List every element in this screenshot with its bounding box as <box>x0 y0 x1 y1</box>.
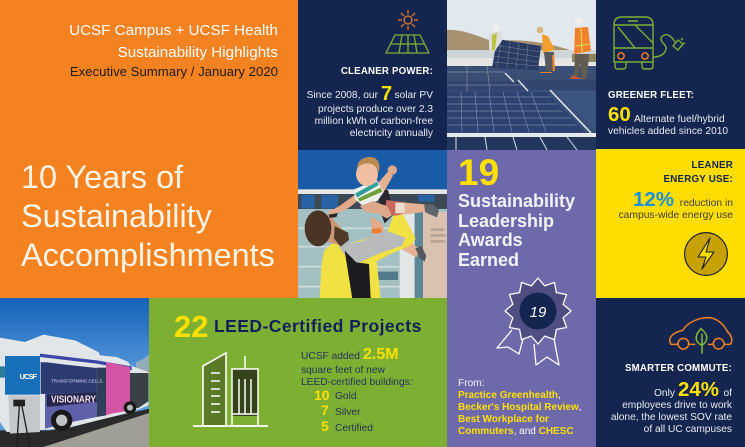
list: certification counts: Silver <box>335 406 360 418</box>
panel: leaner energy use <box>596 149 745 298</box>
panel: orange title <box>0 0 298 298</box>
photo: UCSF electric bus: TRANSFORMING CELLS <box>51 378 103 383</box>
icon: lightning bolt <box>684 232 728 276</box>
icon: award ribbon: 19 <box>530 304 547 321</box>
list: certification counts: Certified <box>335 422 373 434</box>
text: fleet description: Alternate fuel/hybrid <box>634 114 725 125</box>
number: 7 solar projects: 7 <box>381 83 392 105</box>
title: 10 Years of <box>21 159 183 195</box>
photo: UCSF electric bus: VISIONARY <box>51 394 96 405</box>
number: 12 percent: 12% <box>633 188 674 211</box>
text: solar description lines: million kWh of carbon-free <box>315 116 433 126</box>
number: 24 percent: 24% <box>678 378 719 401</box>
list: certification counts: 5 <box>321 418 329 434</box>
text: commute lines: of all UC campuses <box>644 424 732 435</box>
title: Sustainability <box>21 198 212 234</box>
number: 19 awards: 19 <box>458 152 499 193</box>
number: 22 projects: 22 <box>174 309 208 344</box>
icon: award ribbon <box>496 277 572 366</box>
text: LEED buildings line <box>301 364 413 388</box>
text: commute first word: Only <box>654 388 675 399</box>
heading: awards earned <box>458 191 575 270</box>
text: solar description lines <box>315 104 433 138</box>
icon: sun and solar panel <box>385 10 430 54</box>
text: solar description lines: projects produce over 2.3 <box>318 104 433 114</box>
panel: leadership awards: Commuters, and CHESC <box>458 426 574 437</box>
text: LEED buildings line: LEED-certified buildings: <box>301 377 413 388</box>
title <box>21 159 275 273</box>
photo: UCSF electric bus: UCSF <box>20 372 38 381</box>
panel: LEED projects <box>149 298 447 447</box>
text: solar description: Since 2008, our <box>307 90 378 101</box>
text: commute lines: alone, the lowest SOV rate <box>611 412 732 423</box>
photo: UCSF electric bus <box>0 298 149 447</box>
panel: greener fleet <box>596 0 745 149</box>
icon: electric bus <box>613 16 686 70</box>
panel: leadership awards: Best Workplace for <box>458 414 549 425</box>
panel: greener fleet: vehicles added since 2010 <box>608 126 728 137</box>
heading: report title <box>69 22 278 61</box>
heading: cleaner power: CLEANER POWER: <box>341 66 433 77</box>
heading: report title: Sustainability Highlights <box>118 44 278 61</box>
text: solar description continued: solar PV <box>394 90 433 101</box>
heading: awards earned: Awards <box>458 230 523 250</box>
icon: car with leaf <box>669 316 732 354</box>
list: certification counts: 10 <box>314 387 330 403</box>
heading: leaner energy use <box>663 160 733 184</box>
text: energy description: reduction in <box>680 198 733 209</box>
text: LEED description: UCSF added <box>301 351 360 362</box>
number: 2.5M square feet: 2.5M <box>363 346 399 363</box>
text: commute of: of <box>724 388 732 399</box>
heading: leaner energy use: LEANER <box>692 160 733 171</box>
title: Accomplishments <box>21 237 275 273</box>
text: report date: Executive Summary / January 2020 <box>70 64 278 79</box>
panel: cleaner power <box>298 0 447 150</box>
panel: leaner energy use: campus-wide energy use <box>619 210 733 221</box>
photo: workers installing solar panels <box>447 0 596 150</box>
list: certification counts: Gold <box>335 391 357 402</box>
heading: report title: UCSF Campus + UCSF Health <box>69 22 278 39</box>
heading: greener fleet: GREENER FLEET: <box>608 90 694 101</box>
heading: leaner energy use: ENERGY USE: <box>663 174 733 184</box>
text: LEED buildings line: square feet of new <box>301 364 385 376</box>
heading: awards earned: Leadership <box>458 210 554 230</box>
panel: smarter commute <box>596 298 745 447</box>
panel: leadership awards <box>447 150 596 447</box>
number: 60 vehicles: 60 <box>608 103 631 126</box>
heading: LEED-certified projects: LEED-Certified Projects <box>214 316 422 336</box>
text: solar description lines: electricity annually <box>350 128 433 138</box>
panel: leadership awards: Becker's Hospital Review, <box>458 402 582 413</box>
list: certification counts: 7 <box>321 402 329 418</box>
heading: smarter commute: SMARTER COMMUTE: <box>625 363 732 374</box>
icon: buildings <box>193 352 268 427</box>
text: award sources: From: <box>458 378 485 389</box>
text: commute lines <box>611 400 732 435</box>
panel: leadership awards: Practice Greenhealth, <box>458 390 561 401</box>
heading: awards earned: Sustainability <box>458 191 575 211</box>
photo: man lifting child <box>298 150 447 298</box>
list: certification counts <box>314 387 373 434</box>
heading: awards earned: Earned <box>458 250 519 270</box>
text: commute lines: employees drive to work <box>622 400 732 411</box>
